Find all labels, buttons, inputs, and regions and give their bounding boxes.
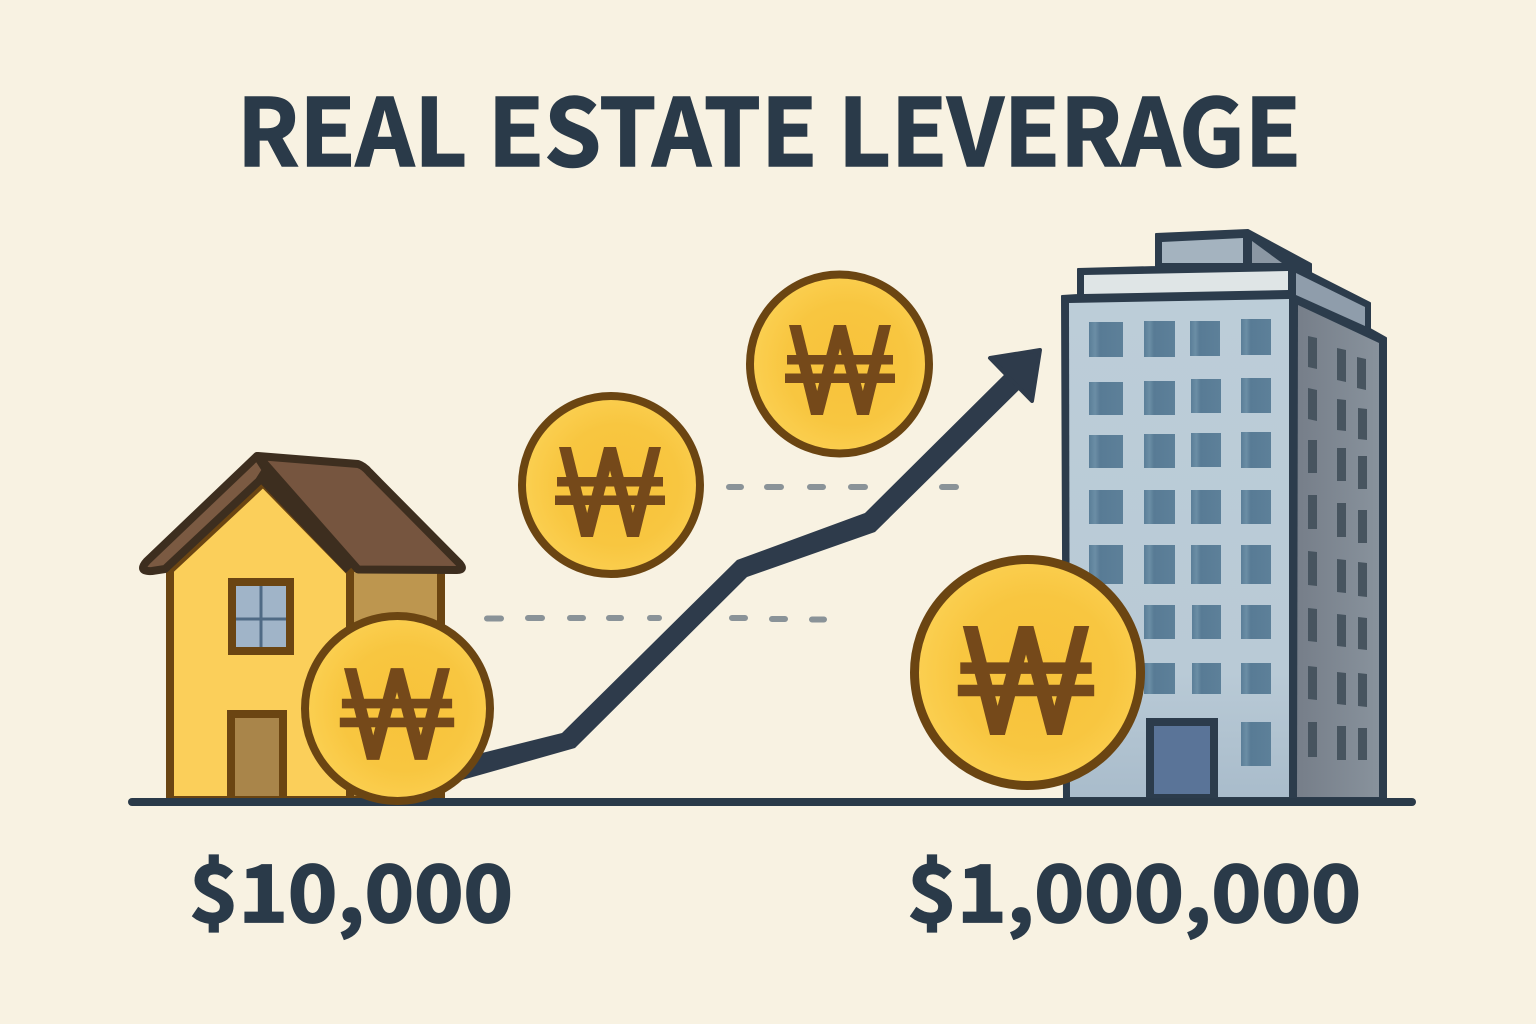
coin: middle left bbox=[522, 396, 700, 574]
house left roof wing bbox=[143, 456, 266, 571]
icon: won sign bbox=[555, 447, 665, 537]
icon: won sign bbox=[785, 325, 895, 415]
ground line bbox=[132, 798, 1412, 806]
coin: by tower bbox=[914, 560, 1140, 786]
title: REAL ESTATE LEVERAGE bbox=[237, 58, 1301, 193]
rooftop unit side bbox=[1252, 241, 1282, 263]
tower silhouette bbox=[1062, 230, 1386, 798]
house side wall bbox=[350, 568, 441, 800]
label: large investment: $1,000,000 bbox=[907, 830, 1361, 945]
icon: office tower bbox=[1062, 230, 1386, 798]
icon: won sign bbox=[340, 668, 454, 760]
house window bbox=[232, 582, 290, 651]
coin: top bbox=[750, 274, 929, 454]
tower side bbox=[1297, 305, 1379, 797]
upper storey front bbox=[1084, 271, 1288, 294]
house door bbox=[231, 714, 283, 800]
icon: house bbox=[143, 456, 462, 800]
label: small investment: $10,000 bbox=[189, 830, 513, 945]
coin: by house bbox=[305, 616, 490, 801]
front windows bbox=[1089, 319, 1271, 766]
upper storey side bbox=[1296, 273, 1365, 326]
dashed guide: upper bbox=[729, 484, 956, 490]
dashed guide: lower bbox=[487, 618, 824, 620]
rising arrow bbox=[450, 350, 1040, 782]
side windows bbox=[1308, 336, 1367, 760]
tower door bbox=[1150, 722, 1214, 798]
house right roof bbox=[258, 456, 462, 570]
tower front bbox=[1069, 299, 1289, 797]
icon: won sign bbox=[958, 626, 1094, 735]
rooftop unit front bbox=[1162, 238, 1243, 263]
house main wall bbox=[170, 483, 350, 800]
house ridge band bbox=[261, 474, 351, 568]
